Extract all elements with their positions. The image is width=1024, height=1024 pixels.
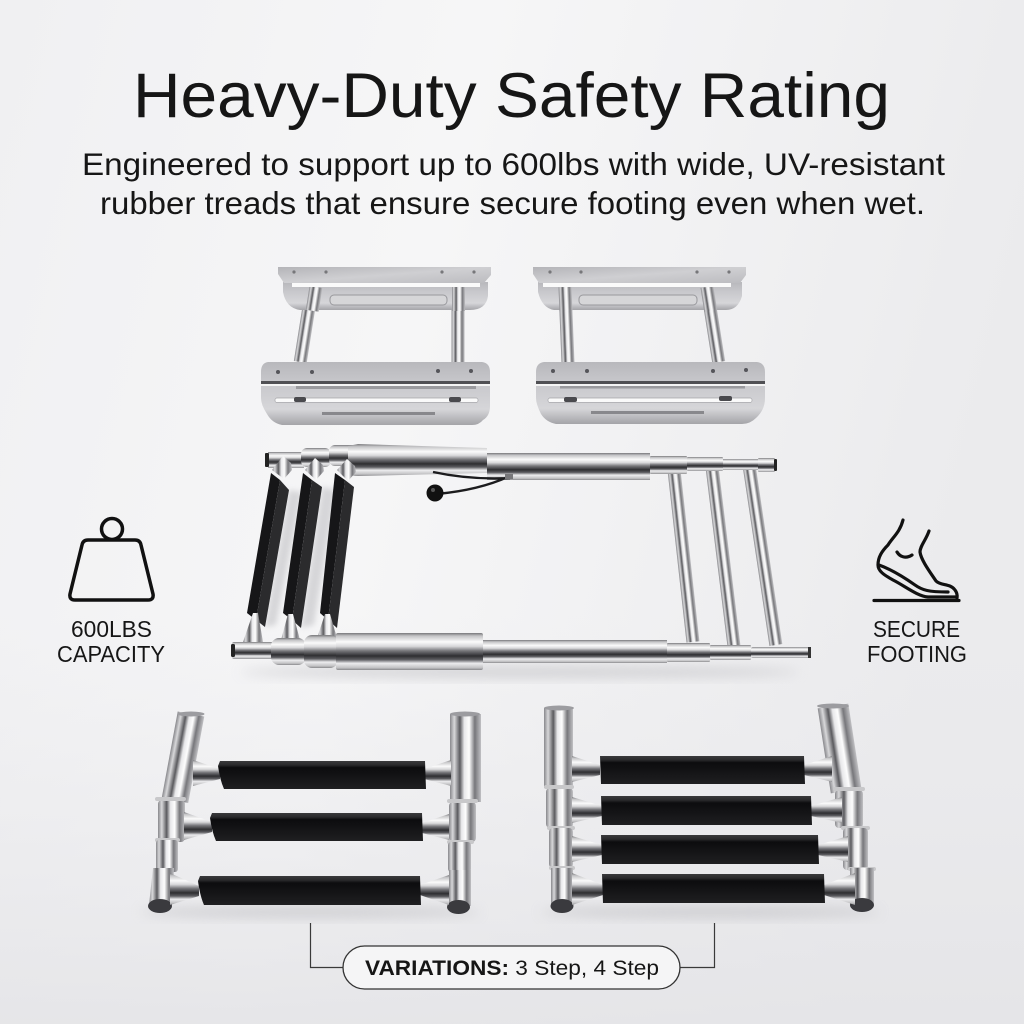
subtitle: Engineered to support up to 600lbs with wide, UV-resistant [82, 146, 945, 182]
feature: secure footing: SECURE [873, 616, 960, 642]
pill label: VARIATIONS: 3 Step, 4 Step [365, 956, 659, 980]
rope pin and knob [426, 472, 513, 502]
feature: 600lbs capacity [57, 518, 165, 667]
3-step ladder [140, 712, 481, 918]
subtitle [82, 146, 945, 221]
treads [572, 756, 855, 905]
feature: 600lbs capacity: CAPACITY [57, 641, 165, 667]
feature: secure footing: FOOTING [867, 641, 967, 667]
main ladder, extended [231, 444, 811, 678]
right rail [447, 712, 481, 914]
icon: weight [70, 518, 153, 600]
left rail [148, 712, 204, 913]
mounting bracket set: right [533, 267, 765, 424]
contact shadow [140, 906, 480, 918]
treads [170, 760, 451, 905]
mounting bracket set: left [261, 267, 491, 425]
left rail [544, 706, 575, 913]
variations callout [310, 923, 714, 989]
black rubber rungs [247, 473, 354, 628]
subtitle: rubber treads that ensure secure footing even when wet. [100, 185, 925, 221]
feature: secure footing [867, 520, 967, 667]
contact shadow [240, 666, 800, 678]
right silver rungs [668, 464, 782, 646]
contact shadow [540, 906, 880, 918]
pill label [343, 946, 680, 989]
title: Heavy-Duty Safety Rating [133, 61, 890, 131]
bracket lines [310, 923, 714, 968]
feature: 600lbs capacity: 600LBS [71, 616, 152, 642]
right rail [817, 704, 876, 912]
4-step ladder [540, 704, 880, 918]
top telescoping tube [265, 444, 777, 481]
bottom telescoping tube [231, 613, 811, 670]
icon: foot on ground [874, 520, 959, 600]
